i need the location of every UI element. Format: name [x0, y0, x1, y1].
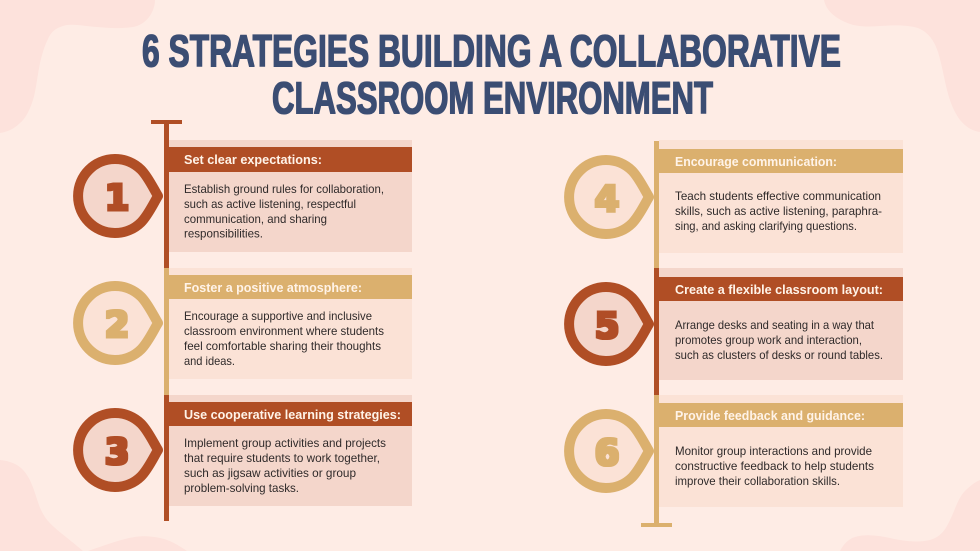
panel: strategy 2	[78, 268, 412, 379]
card 6 background	[659, 395, 903, 507]
card 3 heading	[169, 402, 412, 426]
panel: strategy 4	[569, 140, 903, 253]
card 3 heading: Use cooperative learning strategies:	[184, 407, 401, 422]
card 1 text: Establish ground rules for collaboration,	[184, 182, 384, 196]
card 6 text: improve their collaboration skills.	[675, 474, 840, 488]
card 5 text	[675, 318, 883, 362]
left timeline	[151, 120, 182, 521]
card 2 heading	[169, 275, 412, 299]
panel: strategy 3	[78, 395, 412, 506]
card 6 text: constructive feedback to help students	[675, 459, 874, 473]
card 4 text: skills, such as active listening, paraphra-	[675, 204, 882, 218]
title: CLASSROOM ENVIRONMENT	[272, 72, 713, 124]
card 4 text: sing, and asking clarifying questions.	[675, 219, 857, 233]
card 3 text	[184, 436, 386, 495]
card 5 heading: Create a flexible classroom layout:	[675, 282, 883, 297]
card 3 text: problem-solving tasks.	[184, 481, 299, 495]
card 6 heading	[659, 403, 903, 427]
card 2 text: Encourage a supportive and inclusive	[184, 309, 372, 323]
card 1 background	[169, 140, 412, 252]
card 2 background	[169, 268, 412, 379]
card 1 heading: Set clear expectations:	[184, 152, 322, 167]
icon: number 3 badge	[78, 413, 158, 487]
card 1 text: responsibilities.	[184, 226, 263, 240]
card 4 text: Teach students effective communication	[675, 189, 881, 203]
panel: strategy 5	[569, 268, 903, 380]
right timeline	[641, 141, 672, 527]
icon: number 6 badge: 6	[594, 433, 620, 474]
card 4 heading: Encourage communication:	[675, 154, 837, 169]
card 2 text: classroom environment where students	[184, 324, 384, 338]
icon: number 6 badge	[569, 414, 649, 488]
card 1 text	[184, 182, 384, 240]
icon: number 2 badge	[78, 286, 158, 360]
icon: number 2 badge: 2	[104, 305, 130, 346]
title	[142, 26, 841, 124]
card 1 text: communication, and sharing	[184, 212, 327, 226]
card 2 heading: Foster a positive atmosphere:	[184, 280, 362, 295]
card 6 text: Monitor group interactions and provide	[675, 444, 872, 458]
card 3 text: that require students to work together,	[184, 451, 380, 465]
icon: number 4 badge	[569, 160, 649, 234]
card 5 heading	[659, 277, 903, 301]
card 5 text: Arrange desks and seating in a way that	[675, 318, 875, 332]
card 5 background	[659, 268, 903, 380]
card 6 heading: Provide feedback and guidance:	[675, 408, 865, 423]
card 4 heading	[659, 149, 903, 173]
card 3 text: Implement group activities and projects	[184, 436, 386, 450]
card 1 text: such as active listening, respectful	[184, 197, 356, 211]
card 3 background	[169, 395, 412, 506]
icon: number 3 badge: 3	[104, 432, 130, 473]
icon: number 4 badge: 4	[594, 179, 620, 220]
card 2 text	[184, 309, 384, 368]
icon: number 5 badge: 5	[594, 306, 620, 347]
card 2 text: and ideas.	[184, 354, 235, 368]
panel: strategy 1	[78, 140, 412, 252]
panel: strategy 6	[569, 395, 903, 507]
card 4 text	[675, 189, 882, 233]
icon: number 1 badge	[78, 159, 158, 233]
card 4 background	[659, 140, 903, 253]
card 3 text: such as jigsaw activities or group	[184, 466, 356, 480]
card 1 heading	[169, 147, 412, 172]
icon: number 5 badge	[569, 287, 649, 361]
card 5 text: promotes group work and interaction,	[675, 333, 862, 347]
card 2 text: feel comfortable sharing their thoughts	[184, 339, 381, 353]
card 6 text	[675, 444, 874, 488]
icon: number 1 badge: 1	[104, 178, 130, 219]
card 5 text: such as clusters of desks or round tables.	[675, 348, 883, 362]
